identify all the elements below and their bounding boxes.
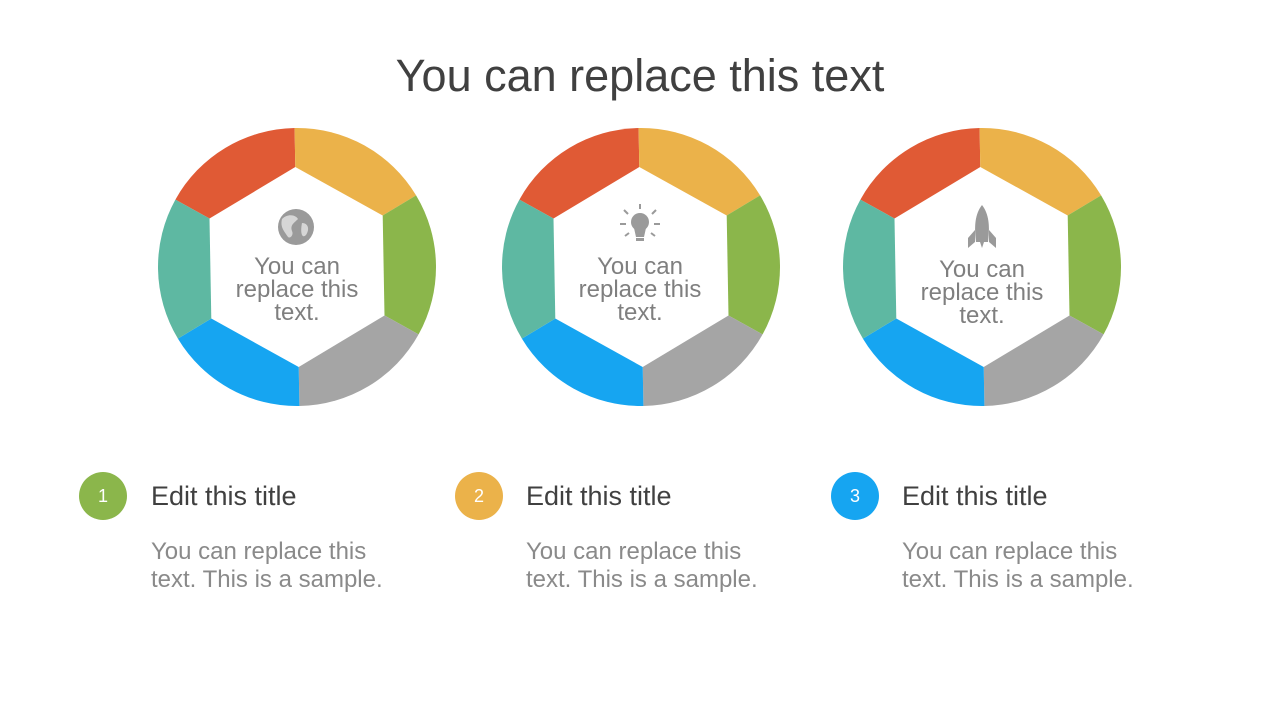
- item text 2: text. This is a sample.: [526, 566, 758, 593]
- badge 2: 2: [474, 486, 484, 506]
- icon: lightbulb: [620, 204, 660, 241]
- icon: rocket: [968, 205, 996, 248]
- item title 2: Edit this title: [526, 481, 672, 511]
- badge 3: 3: [850, 486, 860, 506]
- center text 1: replace this: [236, 276, 358, 303]
- badge 1: 1: [98, 486, 108, 506]
- item title 3: Edit this title: [902, 481, 1048, 511]
- item 1: [79, 472, 383, 593]
- item text 3: text. This is a sample.: [902, 566, 1134, 593]
- badge 1: [79, 472, 127, 520]
- center text 2: text.: [617, 299, 663, 326]
- ring 2: [502, 128, 780, 406]
- title: You can replace this text: [396, 50, 884, 101]
- center text 3: text.: [959, 302, 1005, 329]
- item text 2: You can replace this: [526, 538, 741, 565]
- center text 3: [921, 256, 1043, 329]
- item 3: [831, 472, 1134, 593]
- center text 3: You can: [939, 256, 1025, 283]
- center text 3: replace this: [921, 279, 1043, 306]
- item text 1: text. This is a sample.: [151, 566, 383, 593]
- item title 1: Edit this title: [151, 481, 297, 511]
- center text 2: replace this: [579, 276, 701, 303]
- item text 3: [902, 538, 1134, 593]
- ring 1: [158, 128, 436, 406]
- badge 2: [455, 472, 503, 520]
- item text 2: [526, 538, 758, 593]
- item text 3: You can replace this: [902, 538, 1117, 565]
- item text 1: [151, 538, 383, 593]
- center text 1: text.: [274, 299, 320, 326]
- center text 2: You can: [597, 253, 683, 280]
- badge 3: [831, 472, 879, 520]
- item 2: [455, 472, 758, 593]
- item text 1: You can replace this: [151, 538, 366, 565]
- center text 1: You can: [254, 253, 340, 280]
- center text 2: [579, 253, 701, 326]
- rings chart: [158, 128, 1121, 406]
- icon: globe: [278, 209, 314, 245]
- center text 1: [236, 253, 358, 326]
- ring 3: [843, 128, 1121, 406]
